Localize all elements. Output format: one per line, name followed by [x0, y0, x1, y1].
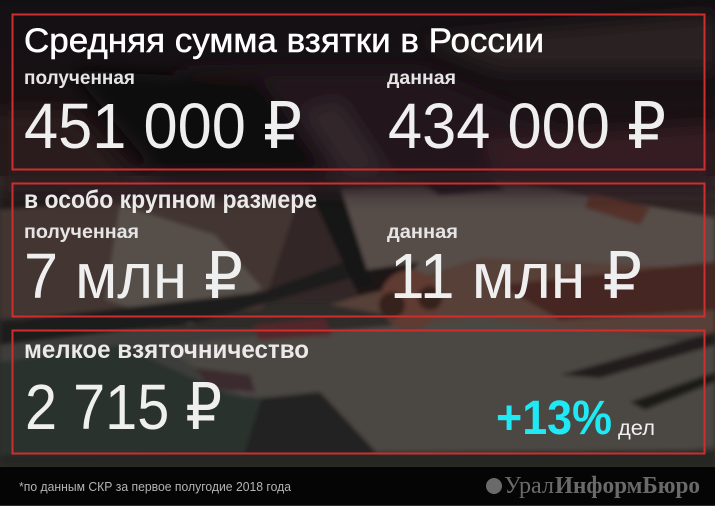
- footer bar: [0, 467, 715, 505]
- logo: UralInformBuro: ИнформБюро: [555, 473, 700, 499]
- callout: plus 13 percent cases: дел: [618, 417, 655, 440]
- footnote: *по данным СКР за первое полугодие 2018 года: [19, 479, 292, 494]
- label: given: данная: [387, 222, 458, 243]
- panel: average bribe: [12, 14, 704, 170]
- logo: UralInformBuro: Урал: [504, 473, 554, 499]
- value: received: 451 000 ₽: [24, 90, 302, 162]
- label: received: полученная: [24, 68, 135, 89]
- label: given: данная: [387, 68, 456, 89]
- value: received: 7 млн ₽: [24, 240, 243, 312]
- panel: especially large: [12, 184, 704, 316]
- heading: petty bribery: мелкое взяточничество: [24, 336, 309, 364]
- heading: especially large: в особо крупном размере: [24, 186, 317, 214]
- panel: petty bribery: [12, 330, 704, 454]
- callout: plus 13 percent cases: +13%: [496, 392, 612, 445]
- logo: UralInformBuro: [486, 473, 700, 499]
- heading: average bribe: Средняя сумма взятки в России: [24, 22, 544, 60]
- value: petty bribe: 2 715 ₽: [25, 371, 222, 443]
- label: received: полученная: [24, 222, 139, 243]
- value: given: 11 млн ₽: [390, 240, 642, 312]
- value: given: 434 000 ₽: [388, 90, 666, 162]
